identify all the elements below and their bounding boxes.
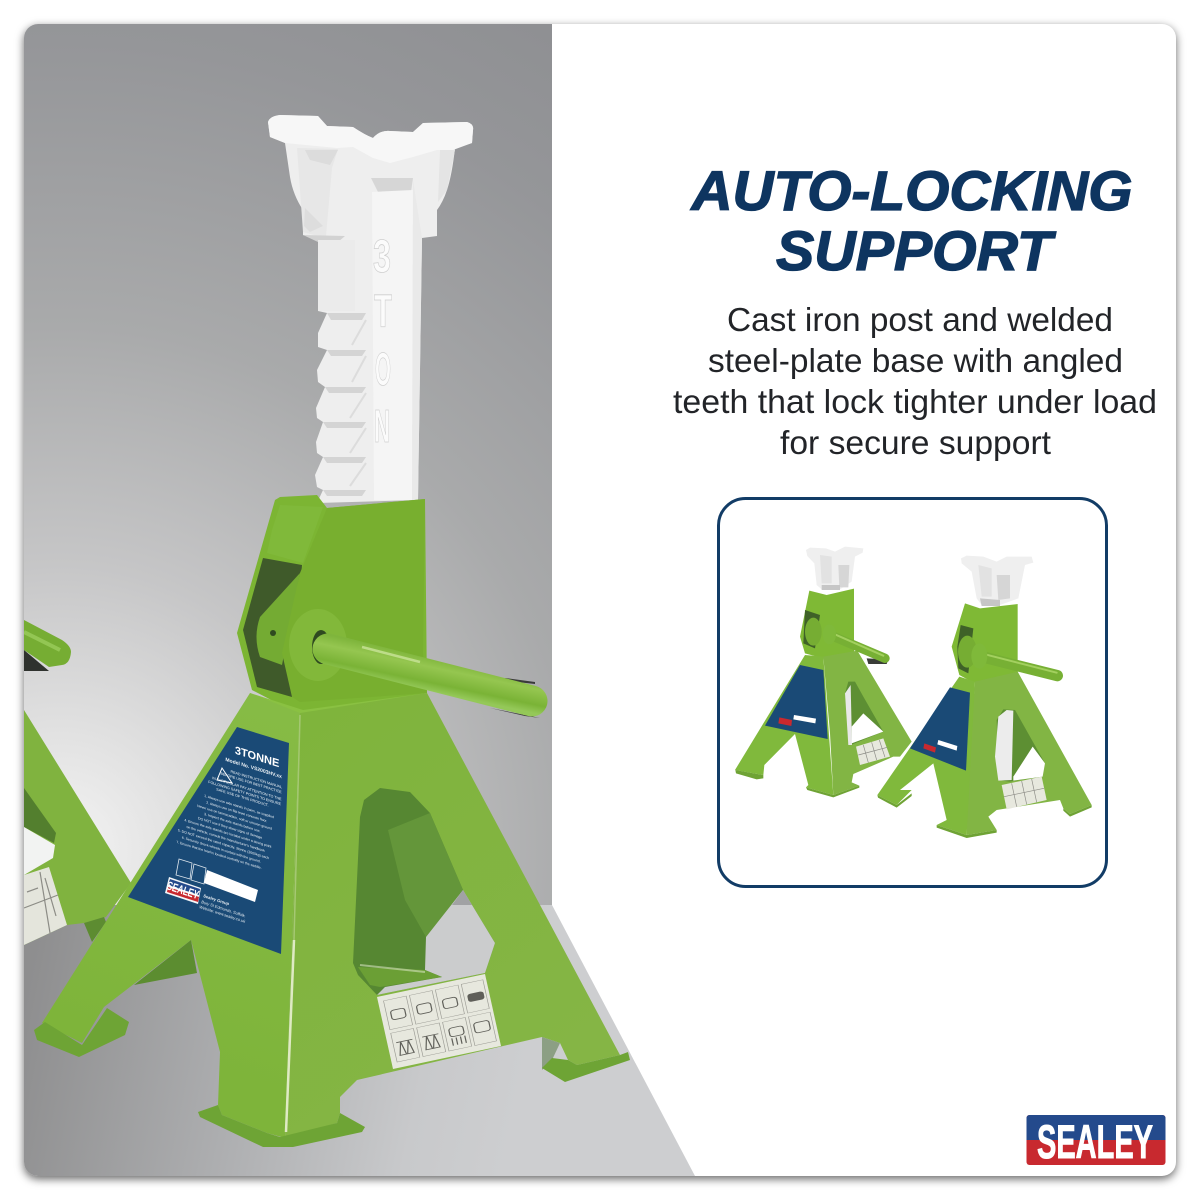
icon: rear axle stand: [735, 547, 912, 797]
warning label: blue safety panel: Website: www.sealey.co.uk: [199, 904, 246, 924]
icon: cast iron ratchet post: O: [375, 343, 391, 395]
description text: steel-plate base with angled: [708, 343, 1123, 380]
warning label: blue safety panel: 7. Ensure that the load is located centrally on the saddle.: [176, 840, 262, 870]
icon: front axle stand: [877, 556, 1092, 838]
warning label: blue safety panel: DO NOT use if they show signs of damage: [198, 816, 262, 840]
panel: grey studio background: [24, 24, 695, 1176]
instruction sticker: [377, 974, 501, 1069]
warning label: blue safety panel: BEFORE USE FOR BEST PRACTICE: [220, 772, 282, 794]
heading: SUPPORT: [776, 219, 1057, 282]
window opening in base: [353, 788, 495, 995]
description text: for secure support: [780, 425, 1052, 462]
heading: [689, 159, 1132, 282]
warning label: blue safety panel: Never use on tarmacadam, soft or uneven ground: [197, 804, 272, 831]
warning label: blue safety panel: 3TONNE: [235, 745, 280, 770]
warning label: blue safety panel: [128, 727, 289, 954]
icon: cast iron ratchet post: T: [374, 285, 392, 337]
description text: [673, 302, 1157, 462]
icon: green locking head: [237, 495, 428, 718]
description text: teeth that lock tighter under load: [673, 384, 1157, 421]
icon: cast iron ratchet post: [268, 115, 473, 503]
warning label: blue safety panel: SEALEY: [165, 879, 201, 902]
warning label: blue safety panel: 2. Always use on flat level concrete floor.: [206, 801, 267, 823]
warning label: blue safety panel: on the vehicle, consult the manufacturer's handbook: [186, 825, 265, 853]
panel: stand front face: [285, 693, 620, 1138]
warning label: blue safety panel: IN PARTICULAR PAY ATTENTION TO THE: [212, 776, 282, 802]
warning label: blue safety panel: 3. Inspect the axle stands before use.: [204, 812, 261, 833]
warning label: blue safety panel: Sealey Group: [203, 893, 230, 906]
icon: release handle: [312, 630, 540, 718]
warning label: blue safety panel: 6. Securely chock wheels in contact with the ground.: [182, 836, 261, 864]
warning label: blue safety panel: Model No. VS2003HV.xx: [225, 757, 282, 780]
warning label: blue safety panel: 5. DO NOT exceed the rated capacity. 3tonne (3000kg) each: [178, 828, 269, 860]
warning label: blue safety panel: READ INSTRUCTION MANUAL: [230, 770, 282, 789]
warning label: blue safety panel: Bury St Edmunds, Suffolk.: [201, 899, 247, 918]
partial second axle stand at left edge: [24, 620, 131, 945]
warning label: blue safety panel: 4. Ensure the axle stands are located under a strong point: [184, 818, 272, 849]
warning label: blue safety panel: FOLLOWING SAFETY POINTS TO ENSURE: [208, 780, 281, 806]
inset panel: pair of axle stands: [718, 498, 1106, 886]
description text: Cast iron post and welded: [727, 302, 1113, 339]
warning label: blue safety panel: SAFE USE OF THIS PRODUCT.: [216, 788, 269, 808]
foot plates and back leg: [34, 715, 630, 1147]
icon: cast iron ratchet post: N: [374, 400, 390, 452]
icon: cast iron ratchet post: 3: [373, 230, 391, 282]
panel: stand left face: [42, 693, 300, 1138]
heading: AUTO-LOCKING: [689, 159, 1132, 222]
warning label: blue safety panel: 1. Always use axle stands in pairs, as supplied: [204, 794, 274, 819]
main axle stand photo illustration: [34, 115, 630, 1147]
